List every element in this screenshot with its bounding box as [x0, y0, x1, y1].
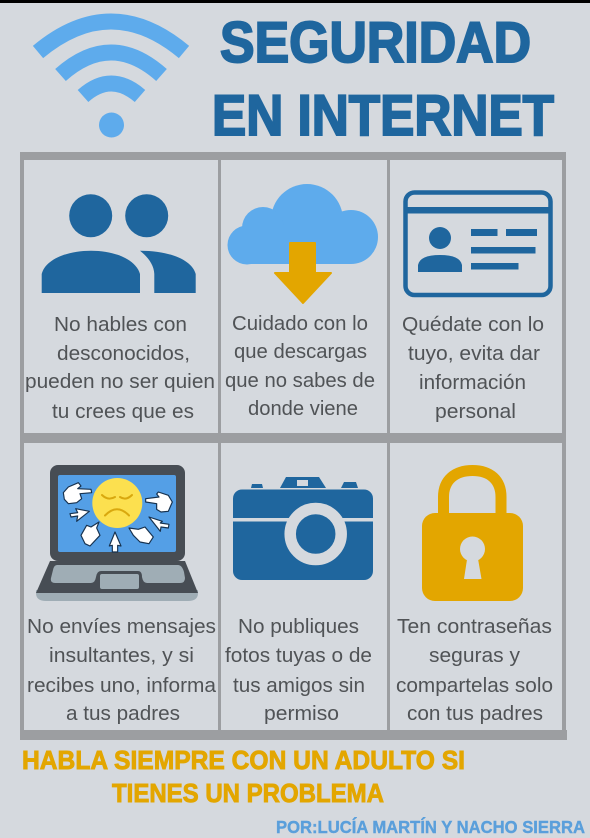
- text: informacion: [402, 313, 544, 423]
- text: fotos: No publiques: [238, 615, 359, 638]
- pointing hands and cursors: [63, 483, 172, 552]
- text: desconocidos: No hables con: [54, 313, 187, 336]
- icon: cloud download: [228, 184, 378, 303]
- text: descargas: Cuidado con lo: [232, 312, 368, 335]
- text: mensajes: No envíes mensajes: [27, 615, 216, 638]
- text: contrasenas: compartelas solo: [396, 674, 553, 697]
- icon: laptop with sad face: [36, 465, 198, 601]
- text: mensajes: recibes uno, informa: [27, 674, 217, 697]
- callout: adult: HABLA SIEMPRE CON UN ADULTO SI: [22, 745, 465, 775]
- icon: wifi: [38, 22, 184, 138]
- text: descargas: donde viene: [248, 397, 358, 420]
- text: informacion: Quédate con lo: [402, 313, 544, 336]
- text: mensajes: insultantes, y si: [49, 644, 194, 667]
- text: fotos: tus amigos sin: [233, 674, 365, 697]
- title: EN INTERNET: [212, 84, 554, 148]
- icon: camera: [233, 477, 373, 580]
- text: fotos: fotos tuyas o de: [225, 644, 372, 667]
- text: descargas: que descargas: [234, 340, 367, 363]
- icon: padlock: [422, 470, 523, 601]
- text: contrasenas: Ten contraseñas: [397, 615, 552, 638]
- grid frame: [20, 152, 567, 740]
- text: desconocidos: pueden no ser quien: [25, 370, 215, 393]
- text: descargas: que no sabes de: [225, 369, 375, 392]
- callout: adult: TIENES UN PROBLEMA: [112, 778, 384, 808]
- text: contrasenas: [396, 615, 553, 725]
- text: descargas: [225, 312, 375, 420]
- text: fotos: [225, 615, 372, 725]
- text: desconocidos: [25, 313, 215, 423]
- text: informacion: personal: [435, 400, 516, 423]
- text: mensajes: a tus padres: [66, 702, 180, 725]
- title: [212, 11, 554, 148]
- text: informacion: información: [419, 371, 526, 394]
- text: contrasenas: seguras y: [429, 644, 521, 667]
- text: fotos: permiso: [264, 702, 339, 725]
- text: desconocidos: desconocidos,: [57, 342, 190, 365]
- text: mensajes: [27, 615, 217, 725]
- text: informacion: tuyo, evita dar: [408, 342, 540, 365]
- text: contrasenas: con tus padres: [407, 702, 543, 725]
- callout: adult: [22, 745, 465, 808]
- title: SEGURIDAD: [220, 11, 531, 75]
- text: desconocidos: tu crees que es: [52, 400, 194, 423]
- icon: two people: [42, 194, 196, 293]
- sad face: [92, 478, 142, 528]
- icon: id card: [405, 192, 551, 295]
